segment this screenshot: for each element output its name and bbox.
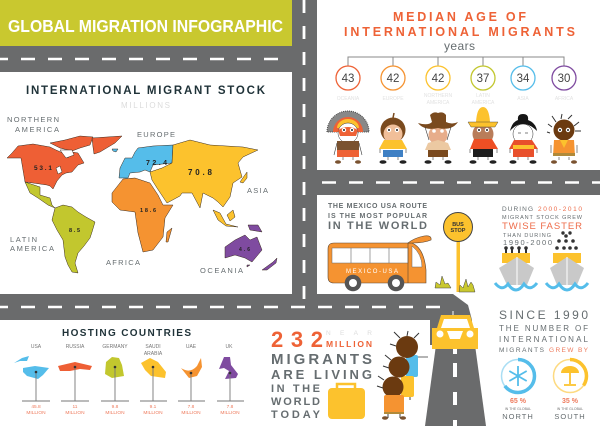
region labels and values: 53.1 (34, 165, 52, 172)
title banner: GLOBAL MIGRATION INFOGRAPHIC (8, 16, 283, 36)
country values: 9.8 (112, 404, 119, 410)
age tree and circles: 34 (517, 73, 530, 85)
country labels: USA (31, 344, 42, 350)
age tree and circles (336, 57, 576, 90)
text: 232 million migrants: ARE LIVING (271, 367, 372, 382)
panel: median age (327, 10, 581, 164)
donut chart: south 35 percent: SOUTH (554, 412, 586, 421)
country values: MILLION (26, 410, 46, 416)
age tree and circles: 42 (432, 73, 444, 85)
icon: bus stop sign (444, 212, 472, 292)
text: since 1990: THE NUMBER OF (499, 324, 588, 333)
text: twice faster: TWISE FASTER (502, 221, 582, 232)
icon: yellow car (432, 311, 478, 349)
region labels: AMERICA (472, 100, 495, 106)
region labels and values: OCEANIA (200, 266, 243, 275)
donut chart: south 35 percent: IN THE GLOBAL (557, 407, 583, 411)
region labels and values: 18.6 (140, 208, 156, 214)
heading: median age: MEDIAN AGE OF (393, 10, 526, 24)
character: Africa (547, 114, 581, 164)
text: since 1990: SINCE 1990 (499, 308, 588, 322)
region labels and values: AFRICA (106, 258, 140, 267)
country values: 45.8 (31, 404, 41, 410)
country labels: UAE (186, 344, 197, 350)
text: twice faster: DURING (502, 206, 533, 213)
text: 232 million migrants: MILLION (326, 339, 372, 349)
text: 232 million migrants (271, 327, 372, 421)
age tree and circles: 43 (342, 73, 354, 85)
country labels: UK (226, 344, 233, 350)
region labels: LATIN (476, 93, 490, 99)
region labels (337, 93, 574, 106)
icon: three walking migrants (377, 331, 428, 420)
donut chart: north 65 percent: 65 % (510, 398, 527, 405)
icon: bus: MEXICO-USA (346, 269, 398, 275)
heading: median age: INTERNATIONAL MIGRANTS (344, 25, 575, 39)
text: twice faster: THAN DURING (503, 233, 551, 239)
icon: suitcase (328, 384, 365, 419)
heading: hosting countries: HOSTING COUNTRIES (62, 328, 191, 339)
region labels: ASIA (517, 96, 529, 102)
icon: grass (435, 276, 475, 292)
country values: 11 (73, 404, 78, 410)
donut chart: north 65 percent: IN THE GLOBAL (505, 407, 531, 411)
text: twice faster: 1990-2000 (503, 238, 552, 247)
country shapes (14, 356, 238, 379)
age tree and circles: 42 (387, 73, 399, 85)
donut chart: south 35 percent: 35 % (562, 398, 579, 405)
text: 232 million migrants: IN THE (271, 383, 320, 395)
region labels and values: ASIA (247, 186, 268, 195)
text: Mexico USA route (328, 203, 427, 232)
panel: hosting countries (14, 328, 244, 416)
country values: 7.8 (188, 404, 195, 410)
text: 232 million migrants: MIGRANTS (271, 351, 372, 368)
icon: ship 2000-2010 (546, 231, 588, 290)
text: since 1990: GREW BY (549, 347, 589, 354)
region labels and values: 70.8 (188, 168, 213, 177)
text: 232 million migrants: TODAY (271, 409, 321, 421)
world map (7, 136, 277, 273)
country values (26, 404, 240, 416)
country values: MILLION (105, 410, 125, 416)
age tree and circles: 37 (477, 73, 489, 85)
icon: bus (328, 236, 431, 291)
text: twice faster: 2000-2010 (538, 206, 582, 213)
country labels: RUSSIA (66, 344, 85, 350)
region labels: EUROPE (382, 96, 404, 102)
country values: MILLION (220, 410, 240, 416)
title banner (0, 0, 292, 46)
country values: MILLION (65, 410, 85, 416)
text: 232 million migrants: NEAR (326, 330, 372, 337)
region labels and values: 4.6 (239, 247, 250, 253)
country values: MILLION (181, 410, 201, 416)
region labels and values: EUROPE (137, 130, 175, 139)
text: twice faster (502, 206, 583, 247)
region labels and values: 72.4 (146, 160, 167, 167)
text: since 1990: INTERNATIONAL (499, 335, 589, 344)
panel: international migrant stock (7, 85, 277, 275)
text: since 1990: MIGRANTS (499, 347, 545, 354)
region labels and values: 8.5 (69, 228, 80, 234)
region labels and values (7, 115, 268, 275)
donut chart: south 35 percent (554, 360, 586, 421)
pin stands (22, 366, 244, 401)
region labels and values: AMERICA (15, 125, 59, 134)
text: Mexico USA route: IS THE MOST POPULAR (328, 213, 427, 220)
character: Asia (509, 114, 538, 164)
icon: ship 1990-2000 (495, 246, 537, 290)
text: twice faster: MIGRANT STOCK GREW (502, 215, 583, 221)
heading: median age (344, 10, 575, 39)
text: Mexico USA route: IN THE WORLD (328, 220, 427, 232)
donut chart: north 65 percent (502, 360, 534, 421)
region labels: AFRICA (555, 96, 574, 102)
heading: international migrant stock: INTERNATIONAL MIGRANT STOCK (26, 85, 266, 97)
donut chart: north 65 percent: NORTH (502, 412, 534, 421)
subheading: millions: MILLIONS (121, 101, 170, 110)
region labels: AMERICA (427, 100, 450, 106)
character: Northern America (418, 112, 458, 164)
country values: 7.8 (227, 404, 234, 410)
country labels: ARABIA (144, 351, 163, 357)
region labels and values: AMERICA (10, 244, 54, 253)
character: Europe (379, 113, 407, 164)
age tree and circles: 30 (558, 73, 570, 85)
character: Latin America (468, 107, 498, 164)
icon: bus stop sign: STOP (451, 228, 466, 234)
subheading: years: years (444, 39, 475, 53)
text: Mexico USA route: THE MEXICO USA ROUTE (328, 203, 427, 210)
country labels: GERMANY (102, 344, 128, 350)
character: Oceania (327, 111, 369, 164)
icon: bus stop sign: BUS (452, 222, 464, 228)
country values: MILLION (143, 410, 163, 416)
country labels: SAUDI (145, 344, 161, 350)
country values: 9.1 (150, 404, 157, 410)
region labels and values: LATIN (10, 235, 37, 244)
text: 232 million migrants: WORLD (271, 396, 320, 408)
text: 232 million migrants: 232 (271, 327, 323, 352)
region labels: NORTHERN (424, 93, 453, 99)
country labels (31, 344, 233, 357)
region labels: OCEANIA (337, 96, 360, 102)
text: since 1990 (499, 308, 589, 354)
region labels and values: NORTHERN (7, 115, 59, 124)
